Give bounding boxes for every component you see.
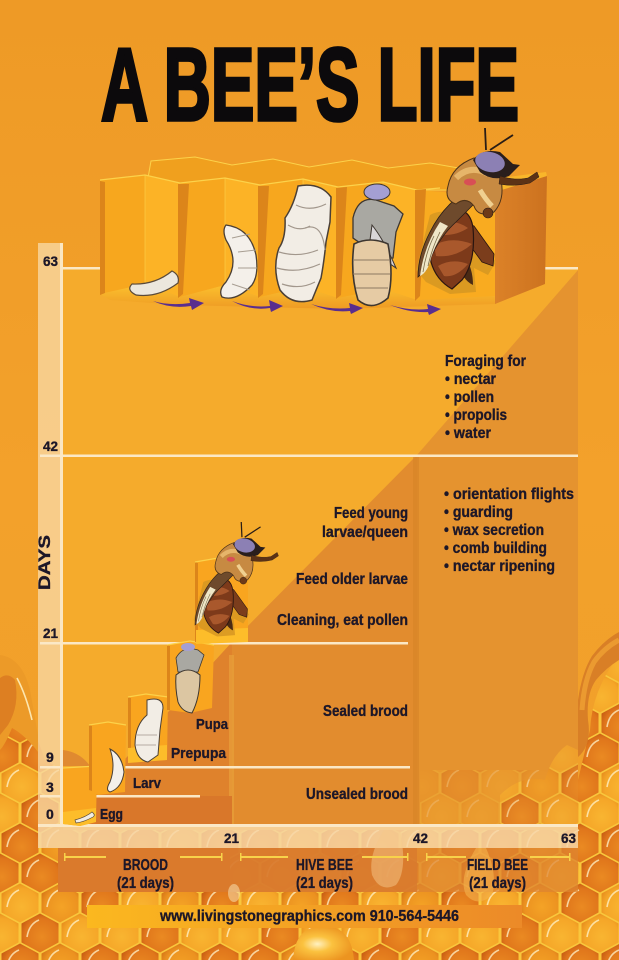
phase label: brood: BROOD	[123, 857, 168, 874]
x axis labels: 21	[224, 830, 239, 846]
y axis labels: 63	[43, 253, 58, 269]
y axis title: DAYS	[35, 535, 54, 590]
icon: adult bee small	[194, 522, 279, 637]
field bee early tasks list: • nectar ripening	[444, 558, 555, 575]
phase label: brood: (21 days)	[117, 875, 174, 892]
y axis labels: 0	[46, 806, 54, 822]
field bee foraging list: • nectar	[445, 371, 496, 388]
x axis labels	[224, 830, 576, 846]
honeycomb background	[0, 655, 619, 960]
phase span brackets	[64, 853, 570, 861]
brown field bee region	[417, 270, 578, 827]
icon: adult bee large	[416, 128, 539, 294]
horizontal axis band	[38, 827, 578, 848]
stage: egg	[130, 271, 178, 296]
day gridlines	[38, 267, 578, 827]
honey drop bottom	[293, 928, 354, 960]
brood stage labels	[100, 716, 229, 823]
phase label: hive bee	[296, 857, 353, 892]
y axis labels: 3	[46, 779, 54, 795]
brood stage labels: Prepupa	[171, 745, 227, 762]
small stage cell: pupa	[167, 641, 214, 713]
small stage cell: egg	[63, 766, 97, 826]
arrows between stages	[153, 298, 441, 315]
phase label: hive bee: (21 days)	[296, 875, 353, 892]
hive bee task labels: Sealed brood	[323, 703, 408, 720]
field bee foraging list: Foraging for	[445, 353, 526, 370]
honey drops	[228, 830, 494, 902]
comb front panels	[100, 175, 496, 309]
small stage cell: prepupa	[128, 694, 168, 763]
field bee early tasks list: • comb building	[444, 540, 547, 557]
field bee early tasks list: • wax secretion	[444, 522, 544, 539]
stage: pupa	[353, 184, 403, 306]
hive bee task labels	[277, 505, 408, 803]
honey cell bump lower right of chart	[500, 745, 578, 827]
comb back row	[148, 157, 470, 190]
y axis labels	[43, 253, 58, 822]
contact band: www.livingstonegraphics.com 910-564-5446	[159, 908, 459, 925]
field bee foraging list	[445, 353, 526, 442]
small stage cell: adult	[195, 558, 248, 644]
phase label: brood	[117, 857, 174, 892]
field bee early tasks list	[444, 486, 574, 575]
phase label: field bee: (21 days)	[469, 875, 526, 892]
hive bee task labels: Feed older larvae	[296, 571, 408, 588]
field bee foraging list: • water	[445, 425, 491, 442]
brood stage labels: Larv	[133, 775, 162, 792]
brown brood staircase region	[63, 642, 234, 827]
days axis band	[38, 243, 63, 827]
hive bee task labels: larvae/queen	[322, 524, 408, 541]
y axis labels: 9	[46, 749, 54, 765]
y axis labels: 21	[43, 625, 58, 641]
y axis labels: 42	[43, 438, 58, 454]
x axis labels: 42	[413, 830, 428, 846]
brown hive bee region	[232, 455, 419, 827]
brood stage labels: Pupa	[196, 716, 229, 733]
honey drips: left	[0, 655, 38, 752]
stage: larva	[221, 225, 257, 298]
field bee early tasks list: • orientation flights	[444, 486, 574, 503]
large comb with life stages	[100, 157, 547, 309]
faint honeycomb through lower chart	[420, 770, 578, 827]
field bee early tasks list: • guarding	[444, 504, 513, 521]
honey drips: right	[578, 632, 619, 757]
chart background	[63, 268, 578, 827]
brood stage labels: Egg	[100, 806, 123, 823]
phase label: hive bee: HIVE BEE	[296, 857, 353, 874]
contact band	[87, 905, 522, 928]
x axis labels: 63	[561, 830, 576, 846]
phase label: field bee: FIELD BEE	[467, 857, 528, 874]
hive bee task labels: Unsealed brood	[306, 786, 408, 803]
small stage cell: larva	[89, 722, 126, 795]
field bee foraging list: • pollen	[445, 389, 494, 406]
hive bee task labels: Cleaning, eat pollen	[277, 612, 408, 629]
hive bee task labels: Feed young	[334, 505, 408, 522]
phase footer band	[58, 848, 578, 892]
field bee foraging list: • propolis	[445, 407, 507, 424]
comb end wall	[495, 175, 547, 304]
phase label: field bee	[467, 857, 528, 892]
stage: prepupa	[276, 185, 331, 302]
